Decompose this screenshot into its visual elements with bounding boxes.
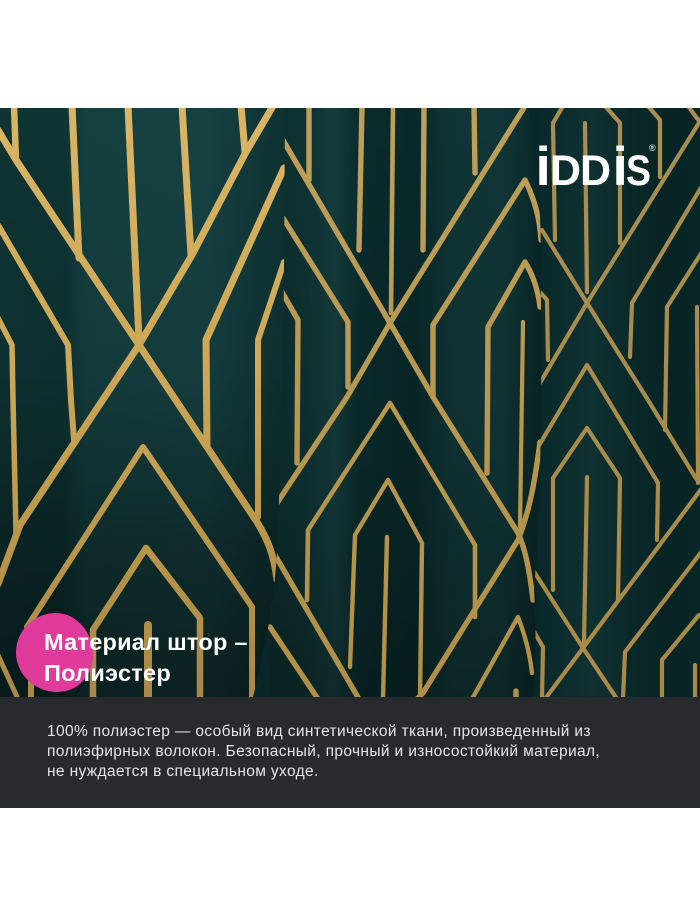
brand logo: D (580, 147, 611, 195)
brand logo: S (626, 147, 651, 195)
description text: не нуждается в специальном уходе. (47, 763, 319, 780)
curtain panel: right fold (530, 106, 700, 699)
curtain panel: middle fold (270, 106, 545, 700)
description text: 100% полиэстер — особый вид синтетической ткани, произведенный из (47, 723, 591, 740)
heading: Материал штор – (44, 629, 248, 655)
brand logo (536, 135, 656, 195)
brand logo: D (550, 147, 581, 195)
description text (47, 723, 600, 780)
curtain photo with gold geometric pattern (0, 108, 700, 697)
heading (44, 629, 248, 686)
brand logo: ® (649, 143, 656, 153)
curtain panel: left fold (0, 106, 286, 699)
description text: полиэфирных волокон. Безопасный, прочный и износостойкий материал, (47, 743, 600, 760)
description band (0, 697, 700, 808)
heading: Полиэстер (44, 660, 171, 686)
pink accent blob (16, 613, 93, 692)
